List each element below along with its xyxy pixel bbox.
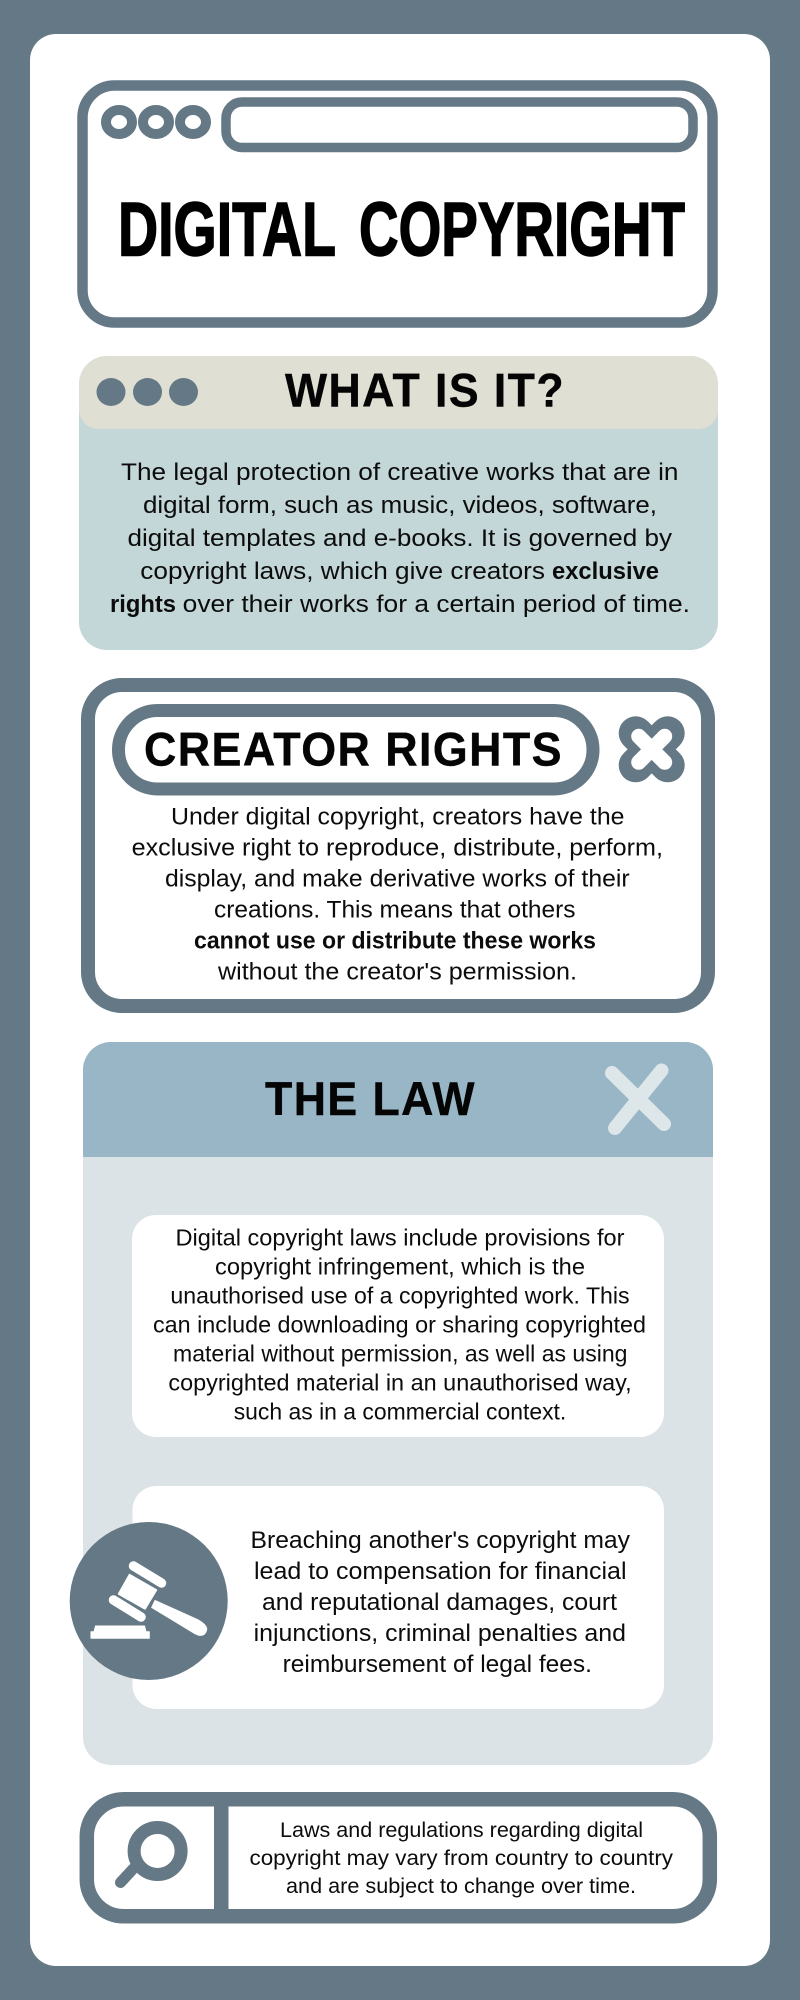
infringement text <box>153 1224 646 1424</box>
panel frame <box>88 685 708 1006</box>
body text: cannot use or distribute these works <box>194 928 596 954</box>
penalties text: Breaching another's copyright may <box>250 1527 631 1554</box>
panel body <box>79 356 718 650</box>
icon: gavel in circle <box>70 1522 228 1680</box>
infringement text: unauthorised use of a copyrighted work. This <box>170 1282 630 1308</box>
body text: display, and make derivative works of their <box>165 866 630 892</box>
penalties text <box>250 1527 631 1678</box>
body text: Under digital copyright, creators have the <box>171 804 624 830</box>
divider <box>214 1800 228 1915</box>
body text: over their works for a certain period of time. <box>183 591 690 618</box>
title: DIGITAL <box>118 188 336 272</box>
panel header band <box>79 356 718 429</box>
body text: without the creator's permission. <box>217 958 577 986</box>
window control dots <box>106 110 206 134</box>
body text <box>110 459 690 618</box>
title: COPYRIGHT <box>359 188 685 272</box>
body text: rights <box>110 591 176 618</box>
infringement text: material without permission, as well as using <box>173 1340 628 1366</box>
panel: the law <box>70 1042 713 1765</box>
icon: close x <box>612 1070 664 1128</box>
header dots <box>96 378 198 406</box>
window frame <box>82 86 712 322</box>
heading pill <box>118 710 593 789</box>
heading: CREATOR RIGHTS <box>144 722 563 776</box>
body text: creations. This means that others <box>214 896 576 924</box>
body text <box>132 804 663 986</box>
penalties text: and reputational damages, court <box>262 1589 617 1616</box>
panel: footer note <box>87 1799 710 1916</box>
panel: title browser window <box>82 86 712 322</box>
heading: WHAT IS IT? <box>285 364 565 416</box>
panel body <box>83 1042 713 1765</box>
panel frame <box>87 1799 710 1916</box>
footer text <box>250 1818 673 1898</box>
body text: digital form, such as music, videos, software, <box>143 492 657 519</box>
panel: what is it <box>79 356 718 650</box>
infringement text: such as in a commercial context. <box>234 1398 566 1424</box>
address bar <box>226 102 693 148</box>
penalties text: lead to compensation for financial <box>254 1558 626 1585</box>
body text: exclusive <box>552 558 659 585</box>
icon: close x outline <box>636 733 668 765</box>
footer text: Laws and regulations regarding digital <box>280 1818 643 1842</box>
body text: digital templates and e-books. It is governed by <box>128 525 673 552</box>
infringement text: copyrighted material in an unauthorised way, <box>168 1370 632 1396</box>
title <box>118 188 685 272</box>
card: penalties <box>132 1486 664 1709</box>
body text: The legal protection of creative works that are in <box>121 459 678 486</box>
infringement text: copyright infringement, which is the <box>215 1254 585 1280</box>
card: infringement <box>132 1215 664 1437</box>
body text: exclusive right to reproduce, distribute, perform, <box>132 834 663 862</box>
footer text: and are subject to change over time. <box>286 1874 636 1898</box>
penalties text: reimbursement of legal fees. <box>283 1651 592 1678</box>
body text: copyright laws, which give creators <box>140 558 545 585</box>
infringement text: Digital copyright laws include provisions for <box>176 1224 625 1250</box>
icon: magnifier <box>120 1828 181 1882</box>
penalties text: injunctions, criminal penalties and <box>254 1620 626 1647</box>
panel header band <box>83 1042 713 1157</box>
heading: THE LAW <box>265 1072 476 1125</box>
footer text: copyright may vary from country to country <box>250 1846 673 1870</box>
panel: creator rights <box>88 685 708 1006</box>
infringement text: can include downloading or sharing copyrighted <box>153 1312 646 1338</box>
